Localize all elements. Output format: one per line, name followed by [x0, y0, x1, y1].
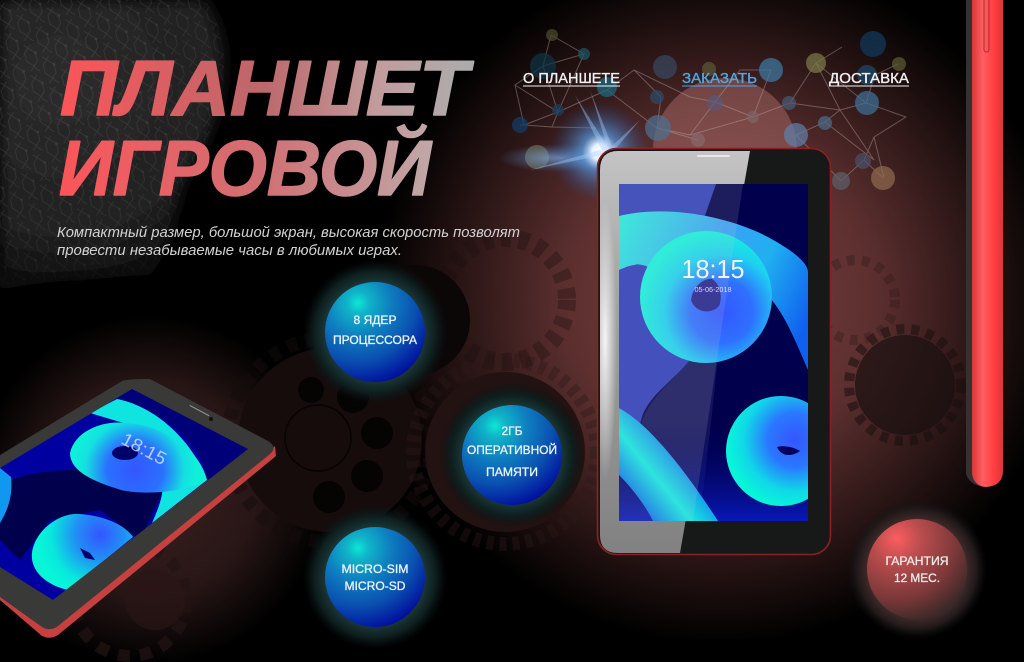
- nav link: about: О ПЛАНШЕТЕ: [523, 71, 620, 87]
- feature badge: RAM: 2ГБ: [501, 424, 523, 438]
- feature badge: RAM: ОПЕРАТИВНОЙ: [467, 442, 557, 457]
- tablet screen wallpaper: [619, 184, 808, 521]
- main tablet: [598, 148, 836, 554]
- feature badge: SIM and SD: MICRO-SIM: [342, 562, 409, 576]
- screen gloss overlay: [619, 184, 743, 521]
- intro text: провести незабываемые часы в любимых играх.: [57, 243, 402, 259]
- background: red radial glow: [375, 0, 1024, 645]
- intro text: [57, 225, 520, 259]
- edge view of tablet: [966, 0, 1003, 487]
- feature badge: warranty: 12 МЕС.: [894, 571, 940, 585]
- background: circuit head: [0, 0, 224, 290]
- nav link: delivery: ДОСТАВКА: [829, 71, 909, 87]
- side tablet screen: [0, 380, 250, 605]
- background: gears: [74, 238, 961, 656]
- title: ПЛАНШЕТ: [60, 44, 474, 132]
- feature badge: RAM: ПАМЯТИ: [486, 465, 538, 479]
- feature badge: RAM: [440, 383, 584, 527]
- background: brown glow behind side tablet: [0, 315, 325, 662]
- network illustration: [512, 29, 906, 222]
- lens flare: [498, 90, 650, 202]
- feature badge: SIM and SD: [303, 505, 447, 649]
- feature badge: cores: ПРОЦЕССОРА: [333, 333, 417, 347]
- navigation: [523, 71, 909, 87]
- title: ИГРОВОЙ: [59, 124, 433, 212]
- feature badge: warranty: [847, 499, 987, 639]
- feature badge: cores: [303, 260, 447, 404]
- title: [59, 44, 474, 212]
- side tablet clock: 18:15: [118, 429, 170, 469]
- nav link: order: ЗАКАЗАТЬ: [682, 71, 757, 87]
- feature badge: warranty: ГАРАНТИЯ: [886, 554, 948, 568]
- intro text: Компактный размер, большой экран, высокая скорость позволят: [57, 225, 520, 241]
- clock: 18:15: [682, 254, 744, 284]
- clock: 05-06-2018: [694, 287, 732, 294]
- side tablet in perspective: [0, 379, 276, 638]
- feature badge: cores: 8 ЯДЕР: [354, 313, 396, 327]
- feature badge: SIM and SD: MICRO-SD: [344, 579, 406, 593]
